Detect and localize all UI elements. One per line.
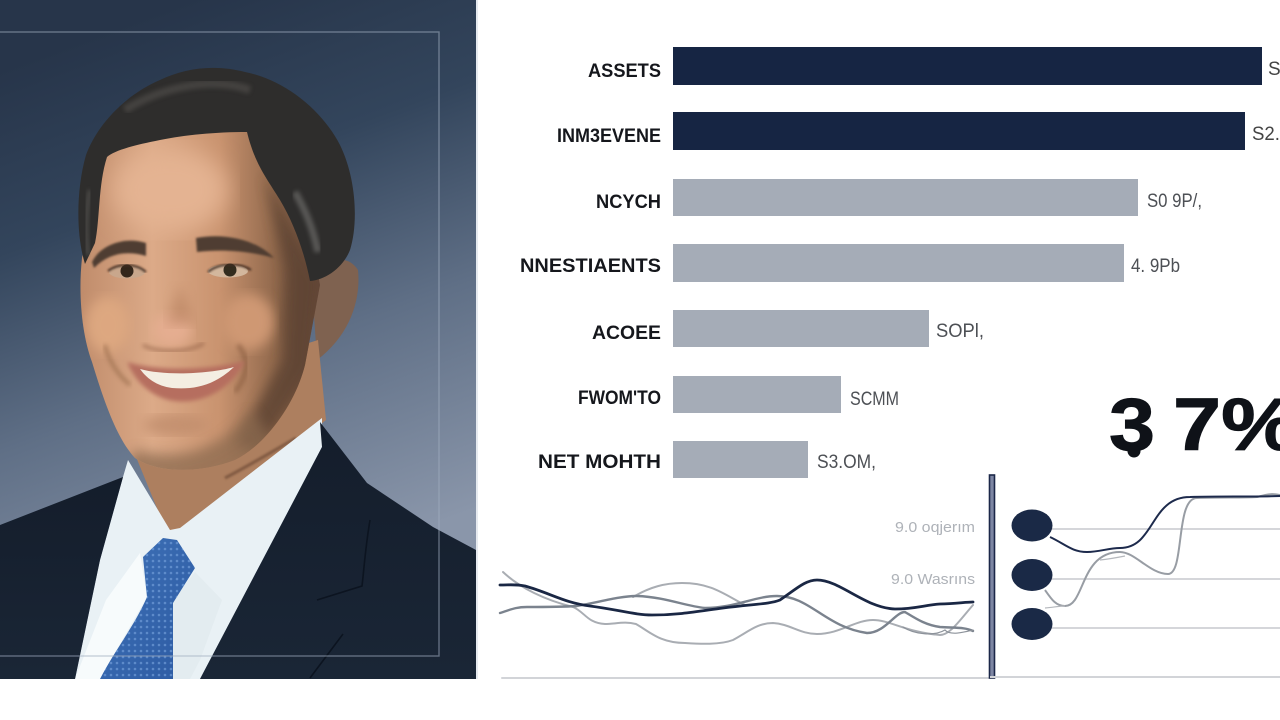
marker: top dot (1012, 510, 1052, 542)
bar row: fwom'to: SCMM (850, 389, 899, 410)
portrait: hair (78, 68, 355, 281)
line: light grey hump (633, 583, 745, 605)
line chart: left trends (500, 572, 990, 678)
line: navy curve (1050, 496, 1280, 552)
bar row: net mohth: S3.OM, (817, 452, 876, 473)
line: light grey series (503, 572, 973, 644)
portrait: smile (127, 361, 245, 401)
portrait: ear (312, 260, 358, 360)
bar row: ncych (596, 179, 1202, 216)
bar row: nnestiaents: NNESTIAENTS (520, 256, 661, 277)
chart label: upper: 9.0 oqjerım (895, 519, 975, 536)
bar row: net mohth: NET MOHTH (538, 452, 661, 473)
chart label: lower: 9.0 Wasrıns (891, 571, 975, 588)
vertical divider (990, 475, 994, 678)
line: mid grey series (500, 596, 973, 633)
portrait: thin frame (0, 32, 439, 656)
portrait: necktie (100, 538, 195, 679)
bar row: assets (588, 47, 1280, 85)
big stat: 37 percent: 3 (1109, 383, 1155, 466)
bar row: inm3evene (557, 112, 1280, 150)
bar row: nnestiaents (520, 244, 1180, 282)
big stat: 37 percent: 7% (1173, 383, 1280, 466)
line chart: right trends with markers (990, 494, 1280, 677)
marker: middle dot (1012, 559, 1052, 591)
bar row: inm3evene: INM3EVENE (557, 126, 661, 147)
panel: portrait photo (0, 0, 476, 679)
portrait: jacket left (0, 477, 123, 679)
line: grey curve (1045, 494, 1280, 606)
portrait: neck (125, 340, 326, 535)
marker: bottom dot (1012, 608, 1052, 640)
portrait: jacket right (200, 422, 476, 679)
portrait: face (80, 125, 320, 490)
bar row: fwom'to: FWOM'TO (578, 388, 661, 409)
bar row: assets: ASSETS (588, 61, 661, 82)
line: scribble end (903, 627, 973, 634)
bar row: nnestiaents: 4. 9Pb (1131, 256, 1180, 277)
portrait: eyebrows (92, 241, 146, 268)
bar row: ncych: NCYCH (596, 192, 661, 213)
bar row: acoee (592, 310, 984, 347)
bar row: acoee: ACOEE (592, 323, 661, 344)
line: navy series (500, 580, 973, 615)
line: faint connector (1045, 556, 1125, 608)
bar row: inm3evene: S2. (1252, 124, 1280, 145)
bar row: net mohth (538, 441, 876, 478)
big stat: 37 percent (1109, 383, 1280, 466)
bar row: fwom'to (578, 376, 899, 413)
bar chart: financial categories (520, 47, 1280, 478)
portrait: eyes (109, 266, 145, 278)
portrait: shirt collar (75, 418, 322, 679)
portrait: nose (143, 343, 204, 351)
bar row: acoee: SOPl, (936, 321, 984, 342)
bar row: ncych: S0 9P/, (1147, 191, 1202, 212)
